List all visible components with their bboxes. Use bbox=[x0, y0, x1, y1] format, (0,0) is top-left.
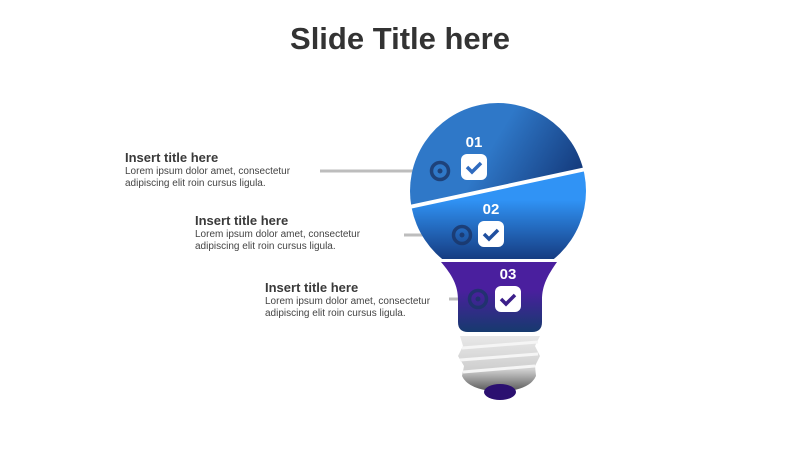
text block 2: Insert title here bbox=[195, 213, 288, 228]
text block 1 bbox=[125, 150, 290, 189]
text block 2: adipiscing elit roin cursus ligula. bbox=[195, 241, 336, 252]
text block 2: Lorem ipsum dolor amet, consectetur bbox=[195, 229, 360, 240]
light bulb diagram bbox=[320, 103, 586, 400]
text block 3 bbox=[265, 280, 430, 319]
icon: check 02 bbox=[478, 221, 504, 247]
text block 3: adipiscing elit roin cursus ligula. bbox=[265, 308, 406, 319]
text block 1: Insert title here bbox=[125, 150, 218, 165]
connector lines bbox=[320, 171, 470, 299]
text block 1: adipiscing elit roin cursus ligula. bbox=[125, 178, 266, 189]
screw base bbox=[458, 336, 540, 400]
text block 1: Lorem ipsum dolor amet, consectetur bbox=[125, 166, 290, 177]
numbers: 03 bbox=[500, 266, 516, 283]
text block 3: Lorem ipsum dolor amet, consectetur bbox=[265, 296, 430, 307]
text block 2 bbox=[195, 213, 360, 252]
section 2 bbox=[412, 172, 586, 259]
text block 3: Insert title here bbox=[265, 280, 358, 295]
section 3 bbox=[441, 262, 557, 332]
icon: check 01 bbox=[461, 154, 487, 180]
title: Slide Title here bbox=[290, 21, 510, 56]
section 1 bbox=[410, 103, 583, 205]
numbers: 02 bbox=[483, 201, 499, 218]
numbers bbox=[466, 134, 516, 283]
icon: check 03 bbox=[495, 286, 521, 312]
markers bbox=[432, 162, 486, 308]
numbers: 01 bbox=[466, 134, 482, 151]
